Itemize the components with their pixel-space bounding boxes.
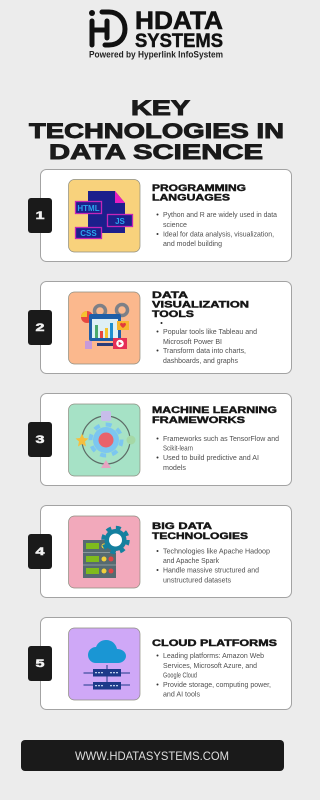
heading [152, 405, 277, 426]
heading: DATA [152, 290, 188, 301]
title: DATA SCIENCE [49, 141, 263, 164]
title [29, 97, 284, 164]
footer website bar [21, 740, 284, 771]
panel: cloud platforms [28, 618, 292, 710]
number badge 2: 2 [36, 322, 44, 334]
heading: FRAMEWORKS [152, 415, 245, 426]
bullet list: science [163, 220, 187, 229]
icon: gear cycle [68, 404, 140, 476]
icon: dashboard monitor [68, 292, 140, 364]
heading [152, 183, 246, 204]
heading [152, 290, 249, 320]
heading: VISUALIZATION [152, 300, 249, 310]
bullet list: Popular tools like Tableau and [163, 327, 257, 336]
number badge 4: 4 [36, 546, 46, 558]
bullet list: Handle massive structured and [163, 566, 259, 574]
bullet list: Technologies like Apache Hadoop [163, 546, 270, 556]
bullet list: Provide storage, computing power, [163, 680, 271, 689]
icon: cloud servers [68, 628, 140, 700]
bullet list: Scikit-learn [163, 444, 193, 452]
bullet list [156, 546, 270, 584]
bullet list: Services, Microsoft Azure, and [163, 661, 257, 670]
number badge 5: 5 [36, 658, 44, 670]
title: TECHNOLOGIES IN [29, 120, 284, 143]
brand name: HDATA [135, 7, 223, 35]
panel: data visualization tools [28, 282, 292, 374]
number badge 4 [28, 534, 52, 569]
icon: code files [68, 180, 140, 252]
panel: programming languages [28, 170, 292, 262]
bullet list: Transform data into charts, [163, 346, 246, 355]
number badge 5 [28, 646, 52, 681]
number badge 1: 1 [36, 210, 44, 222]
heading: TOOLS [152, 309, 194, 320]
heading: BIG DATA [152, 521, 212, 532]
number badge 3 [28, 422, 52, 457]
panel: machine learning frameworks [28, 394, 292, 486]
bullet list [156, 651, 271, 698]
icon: server with gear [68, 516, 140, 588]
bullet list: Frameworks such as TensorFlow and [163, 434, 279, 443]
panel: big data technologies [28, 506, 292, 598]
heading: MACHINE LEARNING [152, 405, 277, 416]
footer website bar: WWW.HDATASYSTEMS.COM [75, 749, 229, 763]
number badge 1 [28, 198, 52, 233]
bullet list: Ideal for data analysis, visualization, [163, 230, 274, 238]
heading: CLOUD PLATFORMS [152, 638, 277, 649]
bullet list: Python and R are widely used in data [163, 210, 278, 219]
heading: PROGRAMMING [152, 183, 246, 194]
bullet list: Used to build predictive and AI [163, 453, 259, 462]
icon: code files: CSS [80, 229, 97, 238]
bullet list [156, 210, 278, 248]
heading: LANGUAGES [152, 192, 230, 204]
bullet list: and Apache Spark [163, 556, 219, 565]
heading: TECHNOLOGIES [152, 531, 248, 542]
bullet list: and AI tools [163, 690, 200, 698]
bullet list: and model building [163, 239, 222, 248]
bullet list: Leading platforms: Amazon Web [163, 651, 264, 660]
heading [152, 521, 248, 542]
bullet list: models [163, 463, 186, 472]
number badge 3: 3 [36, 434, 44, 446]
tagline: Powered by Hyperlink InfoSystem [89, 50, 223, 60]
logo: SYSTEMS [135, 30, 223, 52]
bullet list: Microsoft Power BI [163, 337, 222, 346]
bullet list [156, 322, 257, 365]
number badge 2 [28, 310, 52, 345]
bullet list [156, 434, 279, 472]
icon: code files: JS [115, 217, 126, 226]
logo mark [89, 10, 125, 45]
title: KEY [131, 97, 190, 120]
bullet list: dashboards, and graphs [163, 356, 238, 365]
bullet list: Google Cloud [163, 670, 197, 680]
logo [89, 7, 223, 60]
bullet list: unstructured datasets [163, 576, 231, 584]
icon: code files: HTML [77, 204, 100, 213]
